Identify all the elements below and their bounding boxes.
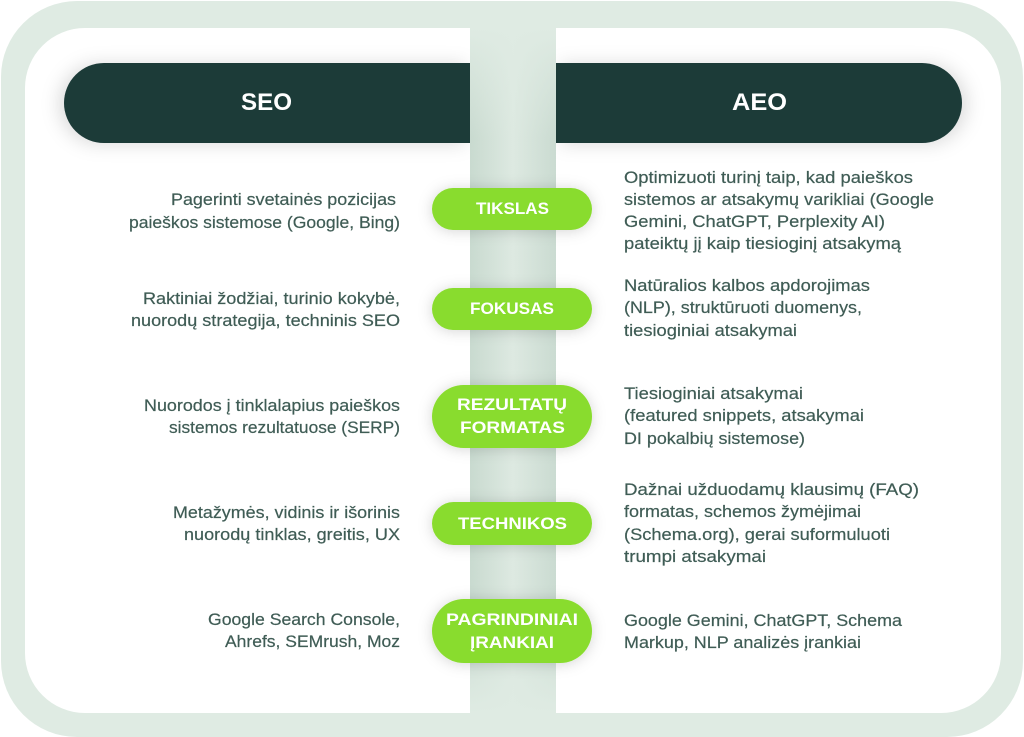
- row 1 SEO text: paieškos sistemose (Google, Bing): [129, 213, 400, 232]
- panel: SEO column background: [25, 28, 470, 713]
- row 4 AEO text: trumpi atsakymai: [624, 547, 766, 566]
- row 1 AEO text: pateiktų jį kaip tiesioginį atsakymą: [624, 234, 902, 253]
- panel: AEO column background: [556, 28, 1001, 713]
- row 5 SEO text: Ahrefs, SEMrush, Moz: [225, 632, 400, 651]
- row 3 label: REZULTATŲ FORMATAS: REZULTATŲ: [457, 395, 567, 414]
- row 4 SEO text: nuorodų tinklas, greitis, UX: [184, 525, 400, 544]
- central column: [470, 28, 556, 713]
- row 5 SEO text: [208, 610, 400, 651]
- row 3 SEO text: Nuorodos į tinklalapius paieškos: [144, 396, 400, 415]
- row 5 SEO text: Google Search Console,: [208, 610, 400, 629]
- row 2 SEO text: Raktiniai žodžiai, turinio kokybė,: [143, 289, 400, 308]
- row 2 SEO text: nuorodų strategija, techninis SEO: [131, 311, 400, 330]
- row 4 AEO text: (Schema.org), gerai suformuluoti: [624, 525, 890, 544]
- row 3 SEO text: sistemos rezultatuose (SERP): [169, 418, 400, 437]
- row 5 label: PAGRINDINIAI ĮRANKIAI: ĮRANKIAI: [470, 633, 554, 652]
- row 1 label: TIKSLAS: [432, 188, 592, 230]
- row 4 AEO text: Dažnai užduodamų klausimų (FAQ): [624, 480, 919, 499]
- row 4 AEO text: [624, 480, 919, 566]
- row 1 label: TIKSLAS: TIKSLAS: [476, 199, 549, 218]
- row 2 label: FOKUSAS: [432, 288, 592, 330]
- AEO heading: AEO: [732, 89, 787, 116]
- row 4 SEO text: [173, 503, 400, 544]
- row 3 AEO text: [624, 384, 864, 448]
- row 5 AEO text: Google Gemini, ChatGPT, Schema: [624, 611, 903, 630]
- row 2 AEO text: Natūralios kalbos apdorojimas: [624, 276, 870, 295]
- row 4 SEO text: Metažymės, vidinis ir išorinis: [173, 503, 400, 522]
- row 4 AEO text: formatas, schemos žymėjimai: [624, 502, 861, 521]
- row 3 AEO text: DI pokalbių sistemose): [624, 429, 805, 448]
- row 5 AEO text: Markup, NLP analizės įrankiai: [624, 633, 861, 652]
- row 5 AEO text: [624, 611, 903, 652]
- row 1 SEO text: Pagerinti svetainės pozicijas: [171, 190, 396, 209]
- row 1 AEO text: Gemini, ChatGPT, Perplexity AI): [624, 212, 885, 231]
- row 2 label: FOKUSAS: FOKUSAS: [470, 299, 554, 318]
- row 2 AEO text: [624, 276, 870, 340]
- row 3 label: REZULTATŲ FORMATAS: [432, 385, 592, 448]
- row 1 SEO text: [129, 190, 400, 232]
- row 2 AEO text: tiesioginiai atsakymai: [624, 321, 797, 340]
- SEO heading: [64, 63, 470, 143]
- row 3 label: REZULTATŲ FORMATAS: FORMATAS: [460, 418, 565, 437]
- row 1 AEO text: sistemos ar atsakymų varikliai (Google: [624, 190, 934, 209]
- row 4 label: TECHNIKOS: TECHNIKOS: [458, 514, 567, 533]
- row 4 label: TECHNIKOS: [432, 502, 592, 545]
- row 3 AEO text: (featured snippets, atsakymai: [624, 406, 864, 425]
- AEO heading: [556, 63, 962, 143]
- row 5 label: PAGRINDINIAI ĮRANKIAI: PAGRINDINIAI: [446, 610, 578, 629]
- SEO heading: SEO: [241, 89, 292, 116]
- row 3 AEO text: Tiesioginiai atsakymai: [624, 384, 803, 403]
- row 3 SEO text: [144, 396, 400, 437]
- row 2 AEO text: (NLP), struktūruoti duomenys,: [624, 298, 862, 317]
- row 5 label: PAGRINDINIAI ĮRANKIAI: [432, 599, 592, 663]
- row 2 SEO text: [131, 289, 400, 330]
- row 1 AEO text: Optimizuoti turinį taip, kad paieškos: [624, 168, 913, 187]
- row 1 AEO text: [624, 168, 934, 253]
